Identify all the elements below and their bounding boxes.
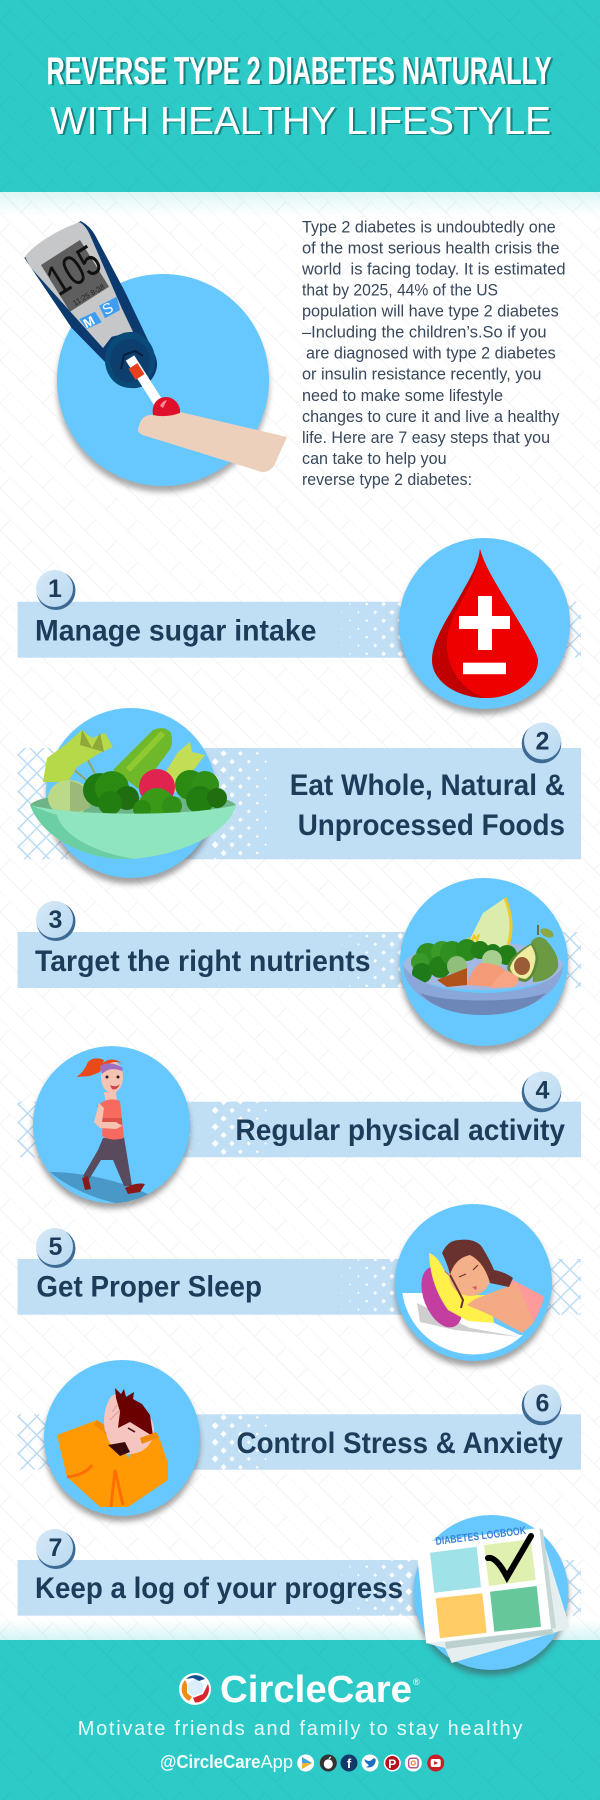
label 5: Get Proper Sleep — [36, 1271, 262, 1304]
label 3: Target the right nutrients — [35, 945, 370, 978]
icon: stressed man — [57, 1388, 168, 1507]
intro text: population will have type 2 diabetes — [302, 302, 559, 320]
icon: sleeping woman — [402, 1240, 544, 1354]
badge 7: 7 — [49, 1534, 62, 1562]
icon: diabetes logbook — [416, 1525, 570, 1663]
social handle: @CircleCare — [160, 1752, 260, 1772]
badge 5: 5 — [49, 1233, 63, 1261]
social handle: App — [260, 1752, 293, 1772]
social icons: f — [347, 1756, 352, 1771]
footer banner — [0, 1620, 600, 1800]
badge 3: 3 — [49, 906, 62, 934]
illustration: glucose meter and finger: 11:25 8-38 — [71, 282, 106, 308]
intro text: of the most serious health crisis the — [302, 239, 560, 257]
social icons — [297, 1754, 444, 1772]
icon: nutrient plate — [403, 898, 563, 1015]
intro text: or insulin resistance recently, you — [302, 365, 542, 383]
logo: CircleCare: CircleCare — [220, 1669, 412, 1711]
intro text: are diagnosed with type 2 diabetes — [306, 344, 556, 362]
badge 6 — [522, 1384, 561, 1425]
label 2: Unprocessed Foods — [298, 809, 565, 842]
step 7: keep a log — [18, 1515, 581, 1676]
intro text: world is facing today. It is estimated — [301, 260, 566, 278]
icon: diabetes logbook: DIABETES LOGBOOK — [435, 1525, 527, 1548]
meter reading: 105 — [38, 236, 110, 306]
illustration: glucose meter and finger: M — [81, 313, 97, 331]
badge 6: 6 — [536, 1390, 549, 1418]
icon: blood drop — [432, 549, 538, 698]
badge 3 — [36, 901, 76, 941]
icon: jogging woman — [50, 1058, 150, 1204]
label 7: Keep a log of your progress — [35, 1572, 403, 1605]
illustration: glucose meter and finger: S — [99, 299, 116, 319]
label 6: Control Stress & Anxiety — [236, 1427, 563, 1460]
title — [46, 50, 552, 143]
title: WITH HEALTHY LIFESTYLE — [50, 100, 551, 143]
badge 1 — [36, 570, 76, 610]
intro text — [301, 218, 566, 489]
social icons: P — [388, 1757, 396, 1771]
step 2: whole foods — [18, 708, 581, 884]
label 4: Regular physical activity — [235, 1114, 565, 1147]
intro text: can take to help you — [302, 450, 447, 468]
badge 4 — [522, 1072, 561, 1112]
intro text: that by 2025, 44% of the US — [302, 281, 498, 299]
label 2 — [290, 769, 565, 842]
tagline: Motivate friends and family to stay healthy — [78, 1718, 522, 1740]
intro text: changes to cure it and live a healthy — [302, 408, 560, 426]
badge 4: 4 — [536, 1076, 550, 1104]
label 1: Manage sugar intake — [35, 615, 316, 648]
logo: CircleCare: ® — [413, 1677, 420, 1687]
step 3: target nutrients — [18, 878, 581, 1052]
intro text: need to make some lifestyle — [302, 387, 503, 405]
step 5: get proper sleep — [18, 1204, 581, 1370]
intro text: Type 2 diabetes is undoubtedly one — [302, 218, 556, 236]
step 4: physical activity — [18, 1046, 581, 1208]
label 2: Eat Whole, Natural & — [290, 769, 565, 802]
step 1: manage sugar intake — [18, 538, 581, 714]
intro text: –Including the children’s.So if you — [302, 323, 546, 341]
icon: salad bowl — [30, 728, 236, 859]
header banner — [0, 0, 600, 216]
badge 1: 1 — [48, 575, 62, 603]
step 6: control stress — [18, 1360, 581, 1522]
badge 2 — [522, 722, 561, 763]
intro text: reverse type 2 diabetes: — [302, 471, 472, 489]
badge 5 — [36, 1228, 76, 1268]
illustration: glucose meter and finger — [24, 221, 287, 492]
badge 2: 2 — [536, 728, 549, 756]
intro text: life. Here are 7 easy steps that you — [302, 429, 550, 447]
badge 7 — [36, 1529, 76, 1569]
